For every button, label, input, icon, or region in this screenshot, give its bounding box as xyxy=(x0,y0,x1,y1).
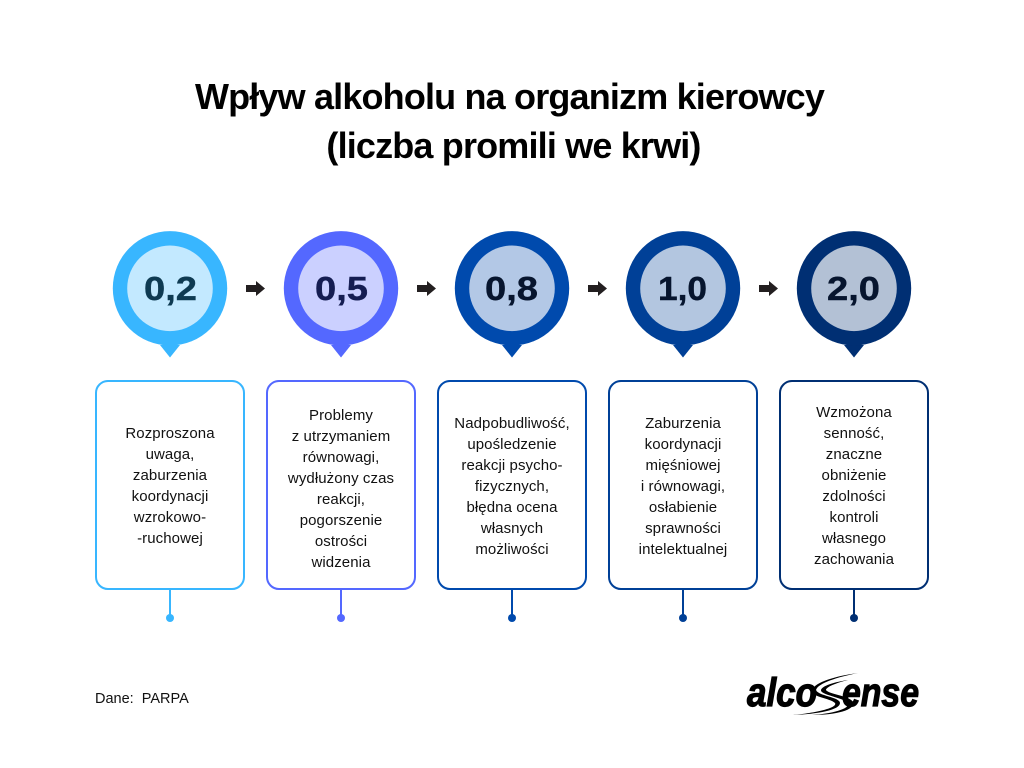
marker: 1,0 xyxy=(626,231,740,358)
text box: 0,5: Problemy xyxy=(309,407,373,424)
text box: 1,0: koordynacji xyxy=(645,436,721,452)
text box: 0,2: wzrokowo- xyxy=(134,509,206,526)
text box: 0,5: widzenia xyxy=(311,554,370,571)
text box: 2,0: Wzmożona xyxy=(816,404,892,421)
arrow 4 xyxy=(759,281,778,296)
text box: 0,8: fizycznych, xyxy=(475,478,549,494)
arrow 1 xyxy=(246,281,265,296)
connector 1 xyxy=(166,589,174,622)
text box: 0,2: koordynacji xyxy=(132,488,208,505)
arrow 2 xyxy=(417,281,436,296)
marker: 0,5 xyxy=(284,231,398,358)
marker: 0,5: 0,5 xyxy=(315,270,368,307)
text box: 0,2: Rozproszona xyxy=(125,425,215,442)
connector 3 xyxy=(508,589,516,622)
text box: 1,0: i równowagi, xyxy=(641,478,725,494)
text box: 1,0: mięśniowej xyxy=(646,456,720,474)
text box: 2,0: senność, xyxy=(824,425,884,442)
text box: 0,5: pogorszenie xyxy=(300,512,382,529)
marker: 0,8 xyxy=(455,231,569,358)
connector 4 xyxy=(679,589,687,622)
text box: 0,8: upośledzenie xyxy=(467,436,557,452)
text box: 0,5: wydłużony czas xyxy=(288,470,394,487)
text box: 0,5: z utrzymaniem xyxy=(292,428,390,445)
logo: alcosense: alco xyxy=(747,671,817,715)
text box: 1,0: intelektualnej xyxy=(639,540,727,558)
text box: 2,0: zdolności xyxy=(822,488,886,505)
text box: 0,8: własnych xyxy=(481,520,543,536)
text box: 1,0: sprawności xyxy=(645,520,721,536)
text box: 0,5: reakcji, xyxy=(317,491,365,508)
text box: 0,8 xyxy=(437,380,587,590)
text box: 2,0: znaczne xyxy=(826,446,882,463)
text box: 0,2: zaburzenia xyxy=(133,467,207,484)
text box: 1,0 xyxy=(608,380,758,590)
title: Wpływ alkoholu na organizm kierowcy xyxy=(195,76,824,117)
title xyxy=(195,76,825,166)
text box: 0,2 xyxy=(95,380,245,590)
marker: 0,8: 0,8 xyxy=(485,270,538,307)
connector 2 xyxy=(337,589,345,622)
source note: Dane: PARPA xyxy=(95,691,189,707)
title: (liczba promili we krwi) xyxy=(326,125,701,166)
marker: 2,0 xyxy=(797,231,911,358)
text box: 2,0: obniżenie xyxy=(822,467,886,484)
text box: 0,2: -ruchowej xyxy=(137,530,203,547)
connector 5 xyxy=(850,589,858,622)
text box: 2,0: zachowania xyxy=(814,551,894,568)
text box: 0,2: uwaga, xyxy=(146,446,194,463)
text box: 1,0: Zaburzenia xyxy=(645,414,721,432)
text box: 2,0: własnego xyxy=(822,530,886,547)
text box: 2,0 xyxy=(779,380,929,590)
text box: 0,5: ostrości xyxy=(315,533,367,550)
text box: 0,5: równowagi, xyxy=(303,449,379,466)
marker: 1,0: 1,0 xyxy=(658,270,707,307)
marker: 0,2 xyxy=(113,231,227,358)
text box: 0,8: możliwości xyxy=(475,540,549,558)
text box: 1,0: osłabienie xyxy=(649,498,717,516)
text box: 0,8: błędna ocena xyxy=(466,498,558,516)
text box: 2,0: kontroli xyxy=(830,509,878,526)
text box: 0,5 xyxy=(266,380,416,590)
marker: 2,0: 2,0 xyxy=(827,270,880,307)
arrow 3 xyxy=(588,281,607,296)
text box: 0,8: reakcji psycho- xyxy=(461,456,563,474)
logo: alcosense: ense xyxy=(842,671,919,715)
marker: 0,2: 0,2 xyxy=(144,270,197,307)
text box: 0,8: Nadpobudliwość, xyxy=(454,414,570,432)
